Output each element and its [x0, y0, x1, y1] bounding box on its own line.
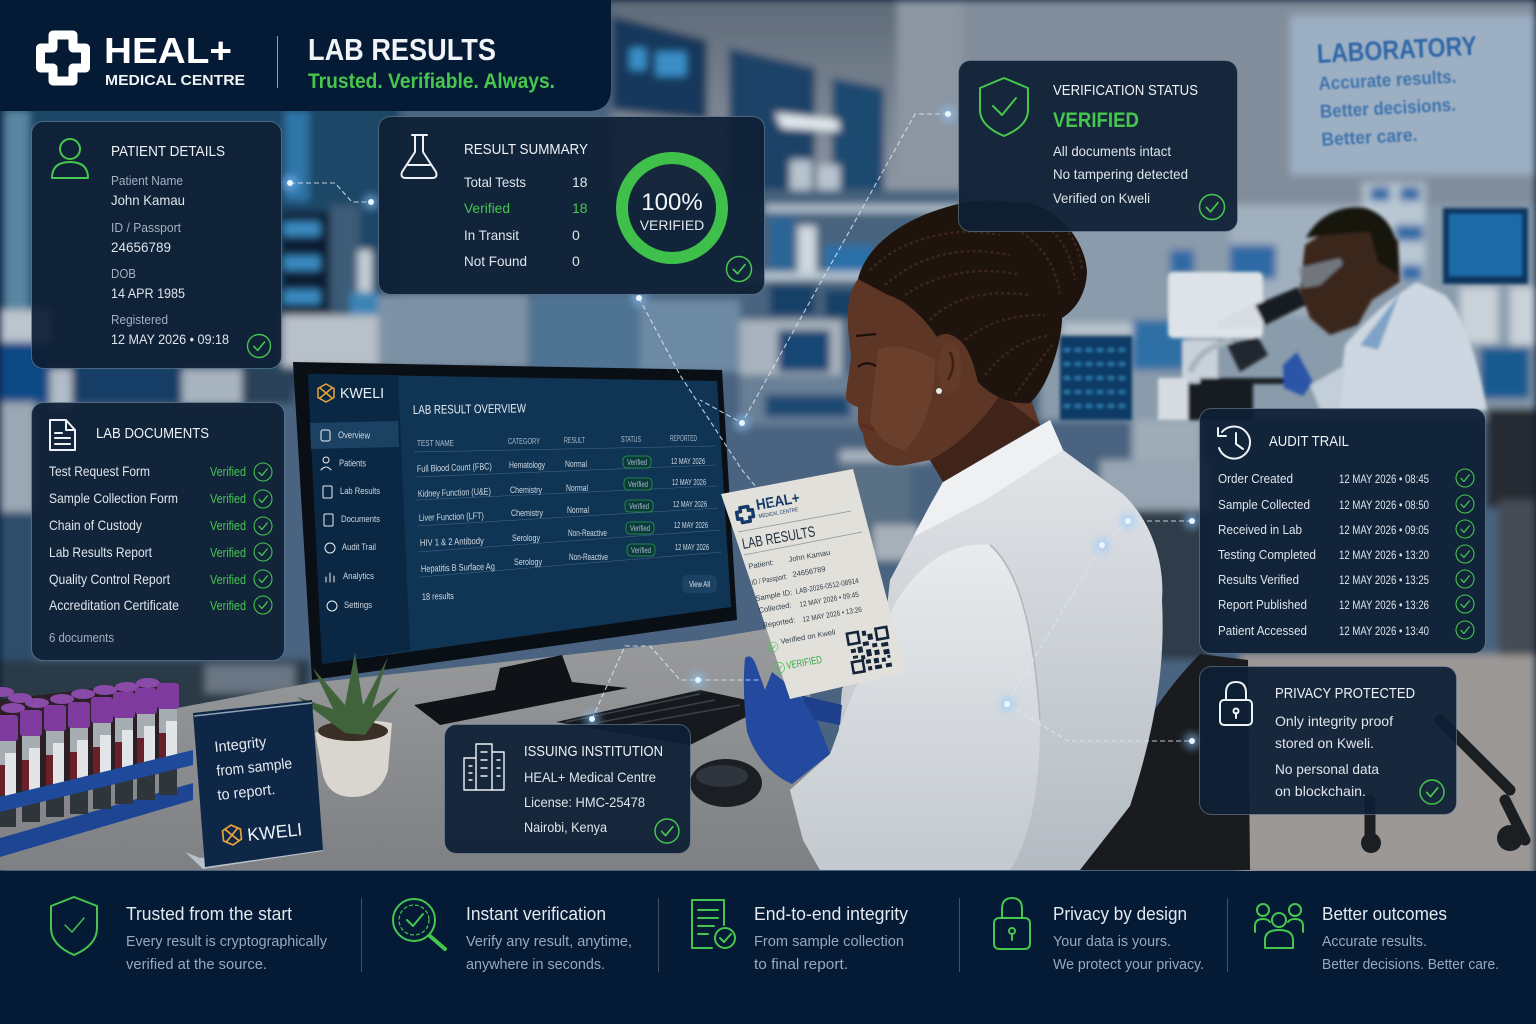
sidebar menu: Overview [338, 430, 370, 442]
feature: end-to-end integrity: From sample collection [754, 933, 904, 950]
icon: document [50, 420, 75, 450]
verification text: VERIFICATION STATUS [1053, 82, 1198, 99]
icon: check [655, 819, 679, 843]
wall sign: laboratory: LABORATORY [1316, 31, 1478, 69]
patient details text: DOB [111, 267, 136, 281]
institution text [524, 743, 663, 835]
screen brand: KWELI [340, 385, 384, 402]
summary table [464, 141, 588, 269]
lower-left backdrop [0, 660, 310, 730]
feature: trusted from the start: Every result is cryptographically [126, 933, 327, 950]
results table: Verified [628, 480, 648, 489]
results table: 12 MAY 2026 [673, 500, 707, 509]
audit events: Patient Accessed [1218, 623, 1307, 638]
technician coat [1337, 282, 1487, 410]
feature: trusted from the start [51, 897, 327, 973]
summary table: Total Tests [464, 174, 526, 190]
results table: View All [689, 580, 710, 589]
handheld lab results sheet: LAB-2026-0512-08914 [795, 576, 859, 596]
right zone [1040, 205, 1536, 420]
handheld lab results sheet: 24656789 [792, 564, 826, 579]
audit events: Report Published [1218, 597, 1307, 612]
icon: check [1200, 194, 1224, 220]
privacy text: Only integrity proof [1275, 713, 1393, 729]
sidebar menu: Lab Results [340, 486, 380, 497]
kweli desk sign: Integrity [214, 734, 268, 756]
results table: Chemistry [510, 485, 542, 496]
blue glove [744, 656, 830, 784]
icon: shield [980, 78, 1028, 136]
audit events: AUDIT TRAIL [1269, 433, 1349, 450]
audit events: Order Created [1218, 471, 1293, 486]
verification text: VERIFIED [1053, 109, 1139, 132]
central shelves [765, 190, 965, 335]
kweli desk sign: KWELI [246, 819, 303, 845]
handheld lab results sheet: Collected: [758, 600, 792, 615]
results table: Chemistry [511, 508, 543, 519]
results table: 12 MAY 2026 [672, 478, 706, 487]
panel: privacy protected [1200, 666, 1456, 814]
audit events: 12 MAY 2026 • 13:40 [1339, 624, 1429, 638]
feature: instant verification: Verify any result, anytime, [466, 933, 632, 950]
documents list: Verified [210, 573, 246, 587]
computer monitor [293, 362, 737, 725]
handheld lab results sheet: MEDICAL CENTRE [758, 507, 799, 520]
patient details text: PATIENT DETAILS [111, 143, 225, 160]
title: LAB RESULTS [308, 32, 496, 67]
wall sign: laboratory: Accurate results. [1318, 67, 1457, 94]
patient details text: 24656789 [111, 239, 171, 255]
handheld lab results sheet: ID / Passport: [751, 572, 788, 587]
institution text: HEAL+ Medical Centre [524, 769, 656, 785]
privacy text: No personal data [1275, 761, 1379, 777]
results table: RESULT [564, 436, 585, 445]
desk surface [0, 625, 860, 870]
handheld lab results sheet: Patient: [748, 558, 774, 571]
results table: REPORTED [670, 434, 697, 443]
kweli logo on screen [318, 384, 334, 402]
documents list: Sample Collection Form [49, 490, 178, 506]
ear and earring [938, 342, 962, 394]
wall sign: laboratory: Better decisions. [1319, 95, 1456, 122]
sheet heal+ logo [736, 506, 754, 523]
handheld lab results sheet: 12 MAY 2026 • 09:45 [799, 590, 859, 609]
patient details text: Patient Name [111, 174, 183, 188]
keyboard and mouse [556, 690, 770, 807]
sidebar menu: Settings [344, 600, 372, 611]
wall sign: laboratory [1316, 31, 1482, 150]
results table: STATUS [621, 435, 641, 444]
handheld lab results sheet: John Kamau [788, 548, 831, 564]
audit events: 12 MAY 2026 • 13:25 [1339, 573, 1429, 587]
results table: Serology [512, 533, 540, 544]
feature: privacy by design: Privacy by design [1053, 904, 1187, 924]
audit events: Results Verified [1218, 572, 1299, 587]
results table: Non-Reactive [568, 528, 607, 539]
feature: privacy by design: We protect your privacy. [1053, 956, 1204, 973]
audit events: 12 MAY 2026 • 08:50 [1339, 498, 1429, 512]
icon: check [726, 256, 752, 282]
feature: privacy by design [994, 898, 1204, 973]
documents list: 6 documents [49, 631, 114, 645]
results table: HIV 1 & 2 Antibody [420, 536, 484, 549]
patient details text: John Kamau [111, 192, 185, 208]
donut: 100% verified: 100% [641, 189, 703, 216]
icon: heal+ cross logo [40, 35, 86, 81]
documents list: Verified [210, 492, 246, 506]
sidebar menu: Patients [339, 458, 366, 469]
institution text: ISSUING INSTITUTION [524, 743, 663, 760]
documents list: Verified [210, 519, 246, 533]
privacy text [1275, 685, 1415, 799]
kweli desk sign: to report. [217, 781, 276, 804]
QR code [847, 627, 893, 673]
office chair [1078, 654, 1525, 870]
feature: better outcomes: Better outcomes [1322, 904, 1447, 924]
blood sample tubes in rack [0, 678, 193, 857]
audit events [1218, 433, 1474, 639]
kweli desk sign: from sample [216, 755, 293, 780]
results table: Full Blood Count (FBC) [417, 461, 492, 475]
handheld lab results sheet: Verified on Kweli [780, 627, 836, 646]
sidebar [308, 374, 410, 664]
handheld lab results sheet: Sample ID: [755, 588, 793, 603]
collar [913, 420, 1063, 537]
header banner [0, 0, 611, 111]
succulent plant in pot [297, 652, 400, 797]
privacy text: on blockchain. [1275, 783, 1366, 799]
summary table: Verified [464, 200, 510, 216]
wall sign: laboratory: Better care. [1321, 125, 1418, 150]
audit events: Sample Collected [1218, 497, 1310, 512]
audit events: Received in Lab [1218, 522, 1302, 537]
feature: better outcomes: Accurate results. [1322, 933, 1427, 950]
feature: privacy by design: Your data is yours. [1053, 933, 1171, 950]
floor [1240, 654, 1536, 874]
results table: Liver Function (LFT) [419, 511, 484, 524]
audit events: 12 MAY 2026 • 08:45 [1339, 472, 1429, 486]
documents list [49, 425, 272, 645]
results table: 12 MAY 2026 [674, 521, 708, 530]
audit events: Testing Completed [1218, 547, 1316, 562]
results table: Kidney Function (U&E) [418, 486, 491, 500]
handheld lab results sheet: 12 MAY 2026 • 13:26 [802, 605, 862, 624]
hair [858, 200, 1087, 403]
results table: Verified [629, 502, 649, 511]
results table: 12 MAY 2026 [675, 543, 709, 552]
handheld lab results sheet: LAB RESULTS [741, 523, 817, 553]
connector lines [282, 106, 1200, 749]
results table: 18 results [422, 591, 454, 603]
sidebar menu: Analytics [343, 571, 374, 582]
icon: padlock [1220, 682, 1252, 725]
panel: issuing institution [444, 724, 690, 854]
documents list: Test Request Form [49, 463, 150, 479]
handheld lab results sheet: Reported: [762, 615, 796, 630]
icon: check [248, 334, 270, 358]
verification text: No tampering detected [1053, 166, 1188, 182]
sidebar menu [321, 430, 380, 611]
documents list: Verified [210, 465, 246, 479]
patient details text: 14 APR 1985 [111, 285, 185, 301]
feature: trusted from the start: Trusted from the start [126, 904, 292, 924]
handheld lab results sheet: VERIFIED [785, 654, 823, 672]
audit events: 12 MAY 2026 • 13:20 [1339, 548, 1429, 562]
handheld lab results sheet: HEAL+ [755, 490, 801, 514]
patient details text: ID / Passport [111, 221, 182, 235]
panel: lab documents [32, 402, 284, 660]
verification text: All documents intact [1053, 143, 1171, 159]
institution text: License: HMC-25478 [524, 794, 645, 810]
feature: better outcomes [1255, 904, 1499, 973]
results table: Normal [565, 459, 587, 470]
braided hair strands [870, 205, 1082, 395]
audit events: 12 MAY 2026 • 09:05 [1339, 523, 1429, 537]
verification text [1053, 82, 1198, 206]
summary table: 0 [572, 253, 580, 269]
icon: flask [402, 135, 436, 178]
screen title: LAB RESULT OVERVIEW [413, 401, 526, 417]
microscope [1168, 272, 1263, 338]
results table: CATEGORY [508, 437, 540, 446]
background technician at microscope [1060, 207, 1528, 420]
feature: better outcomes: Better decisions. Better care. [1322, 956, 1499, 973]
results table: Hepatitis B Surface Ag [421, 561, 495, 575]
results table: 12 MAY 2026 [671, 457, 705, 466]
panel: patient details [32, 122, 282, 368]
results table: Normal [567, 505, 589, 516]
patient details text [111, 143, 229, 347]
icon: check [1420, 780, 1444, 804]
results table: Hematology [509, 460, 545, 471]
results table: Serology [514, 557, 542, 568]
feature: instant verification: Instant verification [466, 904, 606, 924]
scientist reviewing results [744, 200, 1163, 870]
summary table: 0 [572, 227, 580, 243]
lab coat [790, 420, 1163, 870]
summary table: RESULT SUMMARY [464, 141, 588, 158]
documents list: Quality Control Report [49, 571, 170, 587]
behind monitor [378, 295, 528, 367]
monitor stand [414, 655, 628, 725]
panel: audit trail [1200, 408, 1486, 654]
screen right [1443, 208, 1528, 284]
results table [414, 434, 722, 603]
sidebar menu: Audit Trail [342, 542, 376, 553]
panel: result summary [378, 116, 764, 294]
documents list: Chain of Custody [49, 517, 142, 533]
summary table: Not Found [464, 253, 527, 269]
audit events: 12 MAY 2026 • 13:26 [1339, 598, 1429, 612]
privacy text: PRIVACY PROTECTED [1275, 685, 1415, 702]
results table: Verified [627, 458, 647, 467]
donut: 100% verified: VERIFIED [640, 217, 704, 233]
kweli desk sign [185, 700, 323, 869]
summary table: In Transit [464, 227, 519, 243]
privacy text: stored on Kweli. [1275, 735, 1374, 751]
left wall and machines [0, 100, 400, 390]
footer band [0, 871, 1536, 1024]
results table: Verified [630, 524, 650, 533]
results table: Normal [566, 483, 588, 494]
brand name: HEAL+ [104, 30, 232, 71]
documents list: LAB DOCUMENTS [96, 425, 209, 442]
feature: end-to-end integrity: to final report. [754, 956, 848, 973]
panel: verification status [958, 60, 1238, 232]
icon: clock [1218, 427, 1250, 459]
results table: TEST NAME [417, 439, 454, 448]
results table: Non-Reactive [569, 552, 608, 563]
donut: 100% verified [622, 158, 722, 258]
monitor screen [308, 374, 731, 664]
patient details text: Registered [111, 313, 168, 327]
feature: instant verification: anywhere in seconds. [466, 956, 605, 973]
documents list: Verified [210, 546, 246, 560]
summary table: 18 [572, 174, 588, 190]
documents list: Lab Results Report [49, 544, 152, 560]
feature: end-to-end integrity: End-to-end integrity [754, 904, 908, 924]
tagline: Trusted. Verifiable. Always. [308, 70, 555, 93]
handheld lab results sheet [721, 469, 906, 699]
feature: trusted from the start: verified at the source. [126, 956, 267, 973]
technician head [1300, 215, 1400, 335]
summary table: 18 [572, 200, 588, 216]
brand subtitle: MEDICAL CENTRE [105, 72, 245, 89]
sidebar menu: Documents [341, 514, 380, 525]
results table: Verified [631, 546, 651, 555]
documents list: Accreditation Certificate [49, 597, 179, 613]
skin [846, 270, 1040, 482]
documents list: Verified [210, 599, 246, 613]
patient details text: 12 MAY 2026 • 09:18 [111, 331, 229, 347]
window wall [611, 0, 961, 190]
icon: person [52, 139, 88, 178]
feature: instant verification [393, 899, 632, 973]
icon: building [464, 744, 504, 790]
institution text: Nairobi, Kenya [524, 819, 607, 835]
feature: end-to-end integrity [692, 900, 908, 973]
verification text: Verified on Kweli [1053, 190, 1150, 206]
sleeve [790, 545, 1040, 870]
